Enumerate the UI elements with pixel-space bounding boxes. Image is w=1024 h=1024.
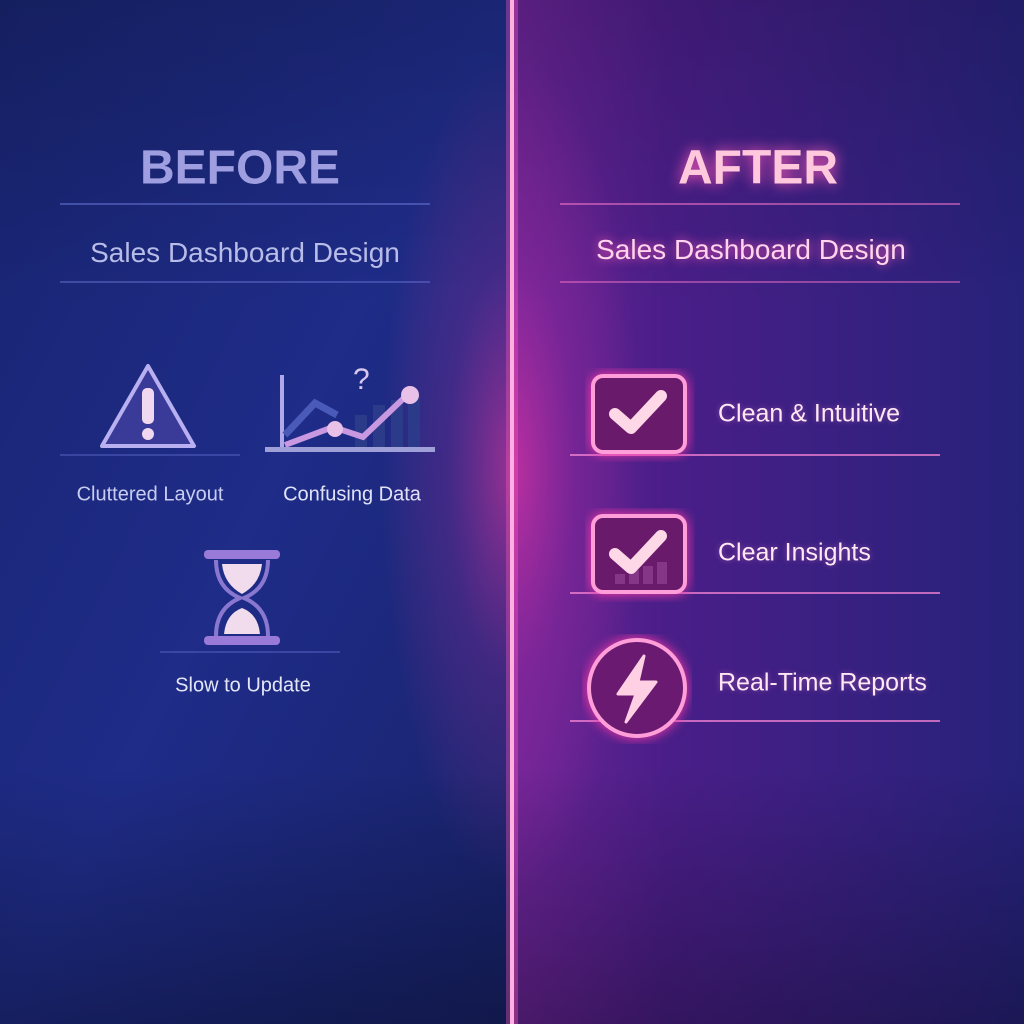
item: real-time reports: Real-Time Reports xyxy=(718,668,927,696)
icon: check box 2 xyxy=(585,508,695,602)
label: cluttered layout: Cluttered Layout xyxy=(77,484,223,506)
item: clean & intuitive: Clean & Intuitive xyxy=(718,400,900,428)
label: slow to update: Slow to Update xyxy=(175,674,311,696)
icon: check box 1 xyxy=(585,368,695,462)
icon: warning triangle xyxy=(100,364,196,448)
subtitle: after: Sales Dashboard Design xyxy=(596,234,906,265)
label: confusing data: Confusing Data xyxy=(283,484,421,506)
icon: confusing chart xyxy=(265,363,435,452)
icon: hourglass xyxy=(204,550,280,645)
title: before: BEFORE xyxy=(140,142,340,194)
icon: confusing chart: ? xyxy=(353,363,370,396)
title: after: AFTER xyxy=(678,142,838,194)
item: clear insights: Clear Insights xyxy=(718,538,871,566)
subtitle: before: Sales Dashboard Design xyxy=(90,237,400,268)
icon: lightning circle xyxy=(582,634,692,744)
